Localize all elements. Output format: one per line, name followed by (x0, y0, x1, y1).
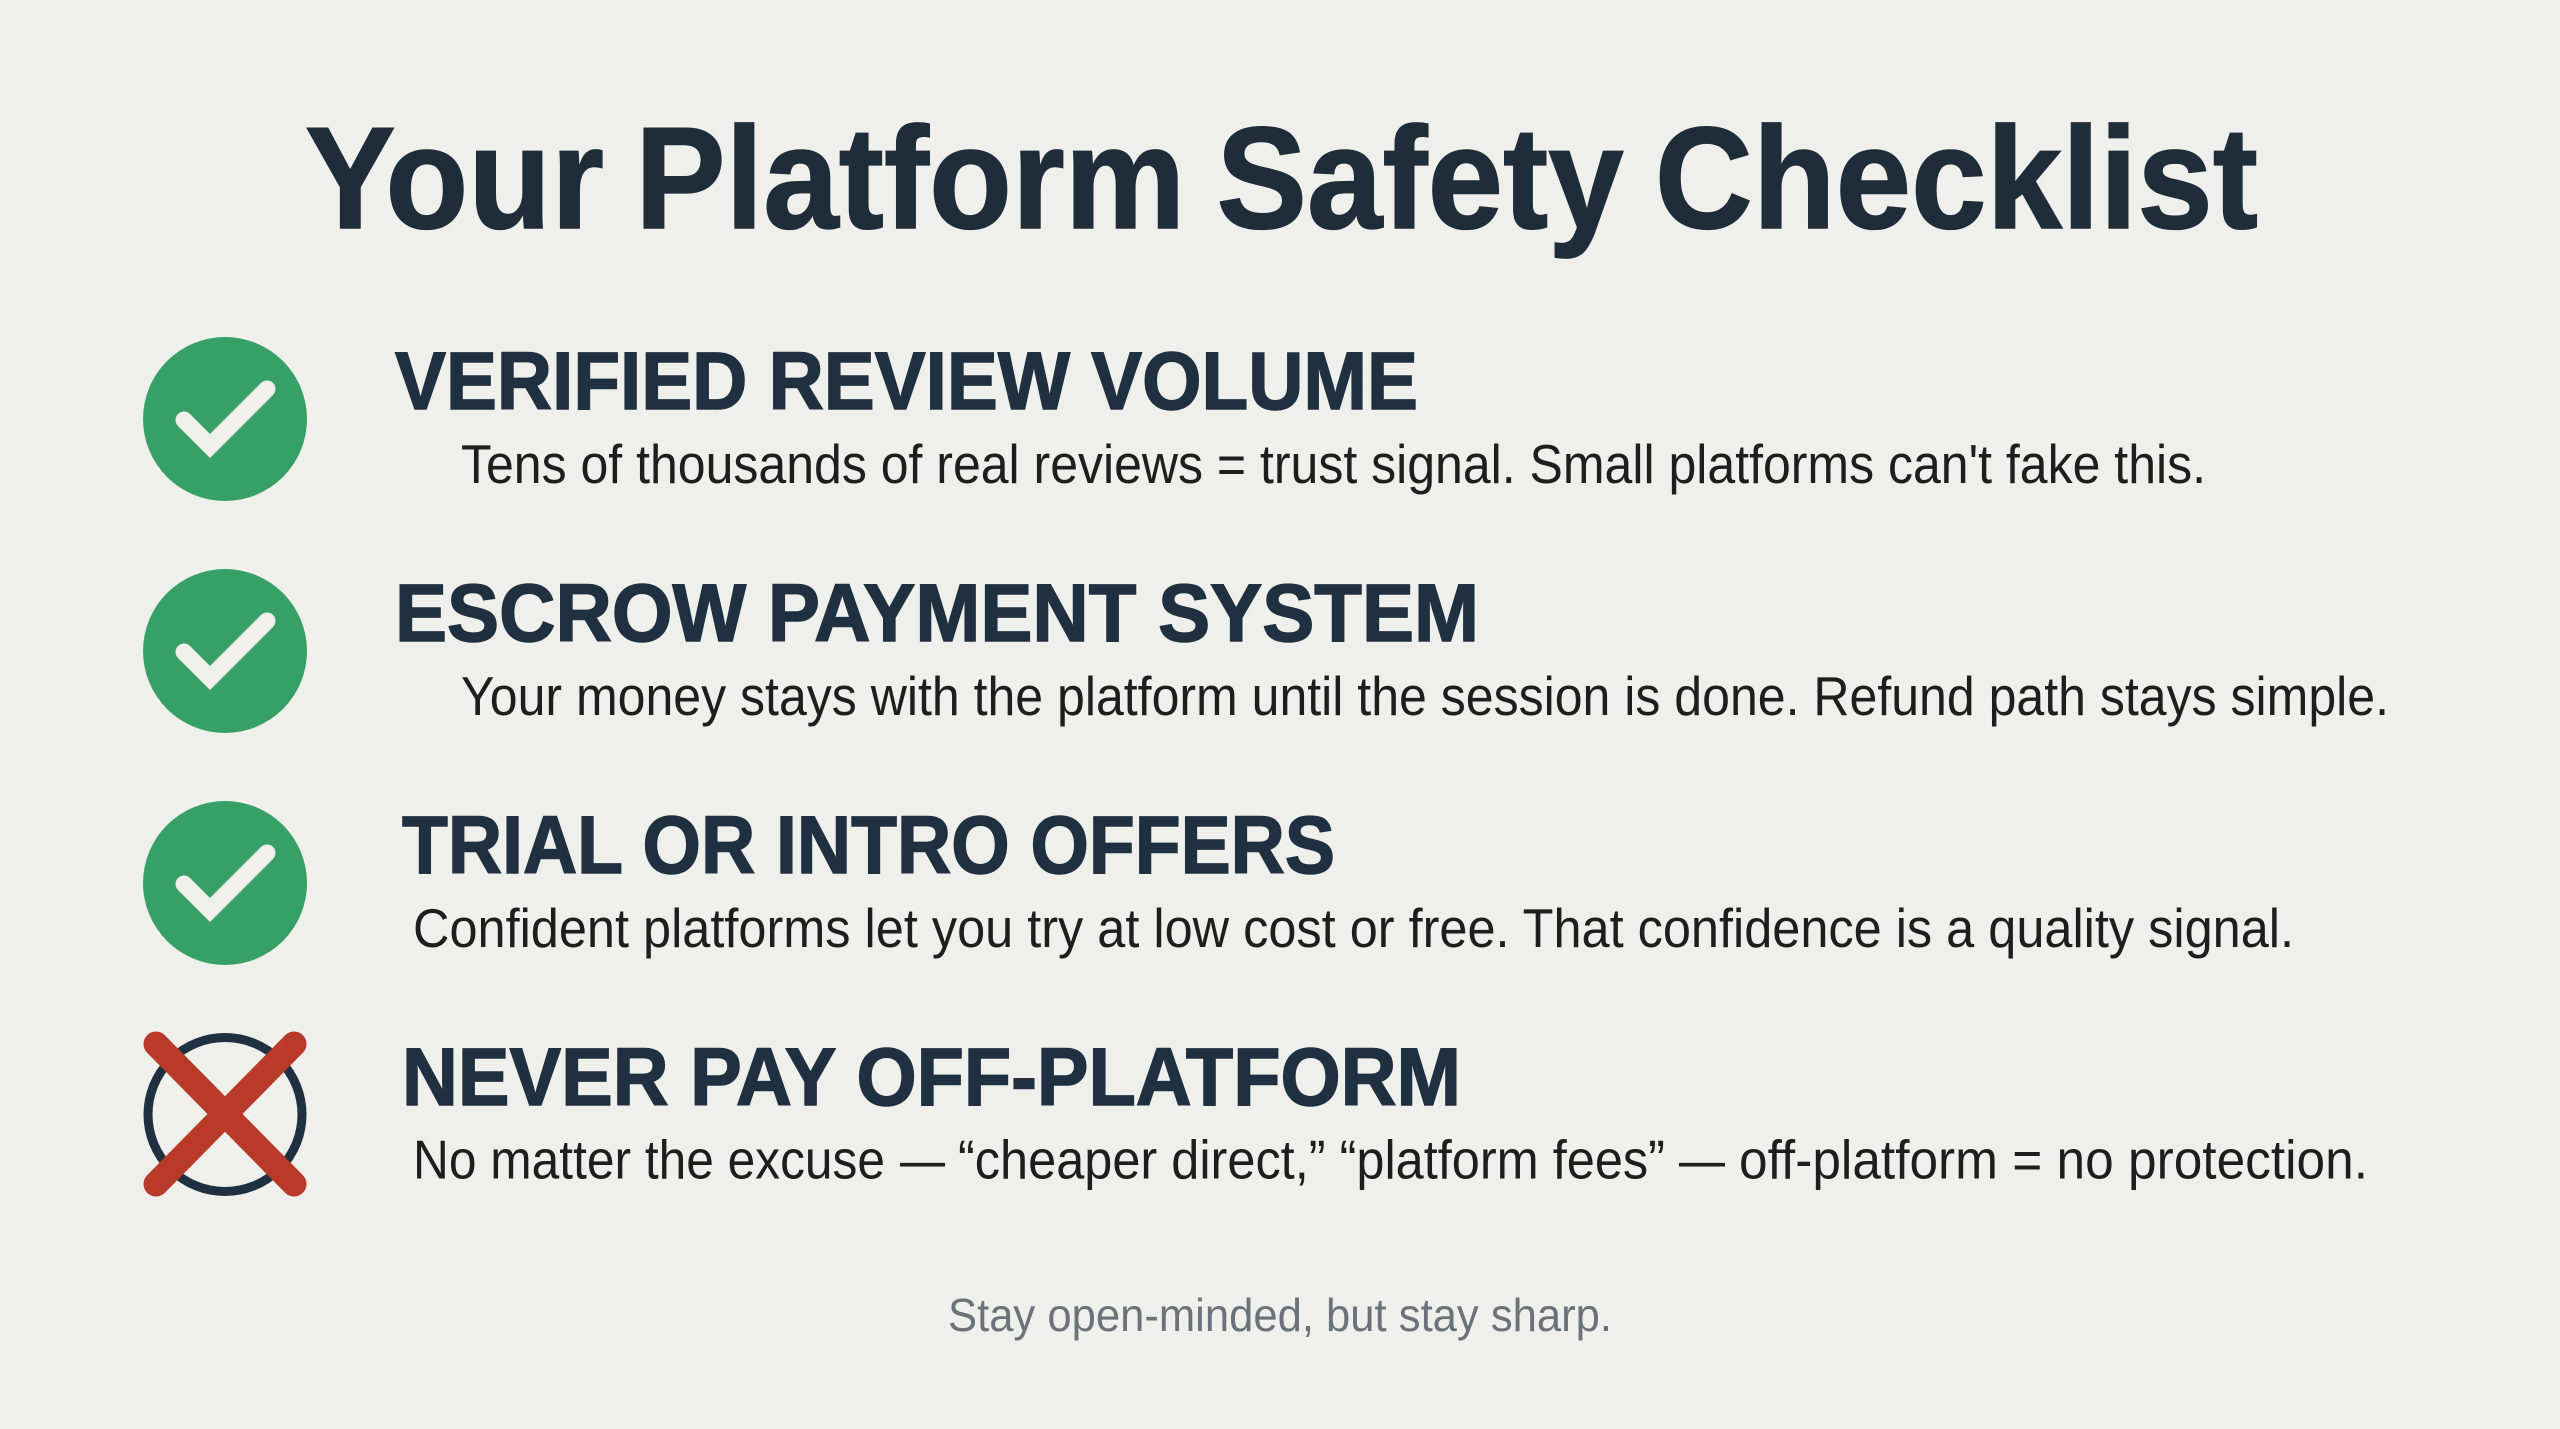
description: never pay off-platform: — (1679, 1128, 1725, 1190)
checklist item: verified review volume (143, 336, 2206, 501)
icon: green check (143, 569, 307, 733)
description: never pay off-platform: — (900, 1128, 945, 1190)
description: verified review volume: Tens of thousands of real reviews = trust signal. Small platforms can't fake this. (461, 433, 2206, 495)
description: never pay off-platform: “cheaper direct,” “platform fees” (958, 1128, 1665, 1190)
checklist item: trial or intro offers (143, 800, 2294, 965)
description: never pay off-platform: No matter the excuse (413, 1128, 885, 1190)
checklist item: never pay off-platform (148, 1032, 2368, 1192)
description: never pay off-platform: off-platform = no protection. (1739, 1128, 2368, 1190)
icon: green check (143, 801, 307, 965)
description: never pay off-platform (413, 1128, 2368, 1190)
checklist item: escrow payment system (143, 568, 2389, 733)
heading: never pay off-platform: NEVER PAY OFF-PLATFORM (402, 1032, 1461, 1123)
description: trial or intro offers: Confident platforms let you try at low cost or free. That confidence is a quality signal. (413, 897, 2294, 959)
heading: trial or intro offers: TRIAL OR INTRO OFFERS (402, 800, 1335, 891)
heading: escrow payment system: ESCROW PAYMENT SYSTEM (395, 568, 1479, 659)
description: escrow payment system: Your money stays with the platform until the session is done. Refund path stays simple. (461, 665, 2389, 727)
icon: red cross over ring (148, 1038, 302, 1192)
footer note: Stay open-minded, but stay sharp. (948, 1289, 1612, 1341)
title: Your Platform Safety Checklist (305, 97, 2258, 259)
icon: green check (143, 337, 307, 501)
heading: verified review volume: VERIFIED REVIEW VOLUME (395, 336, 1418, 427)
